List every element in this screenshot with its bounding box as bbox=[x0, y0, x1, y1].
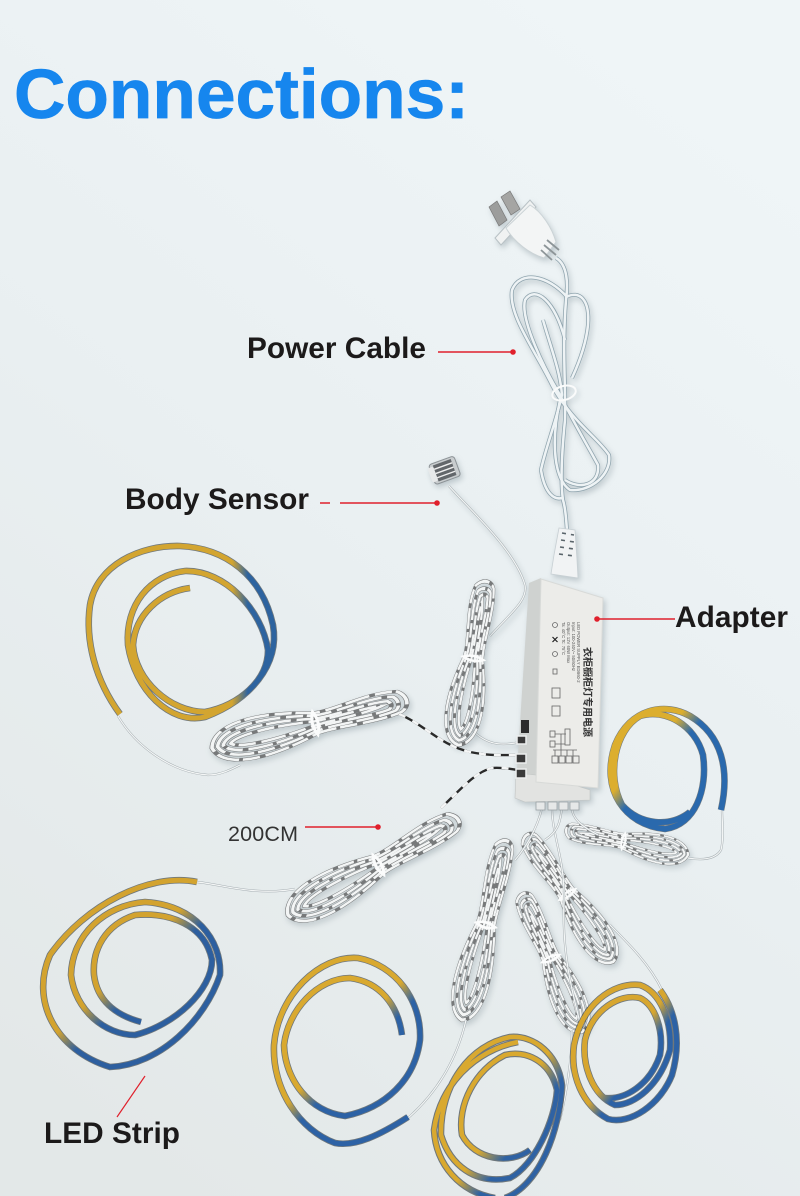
wire bundle: sensor bbox=[441, 578, 504, 748]
body sensor bbox=[426, 456, 527, 744]
callout: power cable bbox=[247, 332, 516, 365]
adapter label text: LED POWER SUPPLY EDB60-2 bbox=[576, 622, 581, 683]
cable loops bbox=[512, 258, 609, 530]
wire bundle: upper left bbox=[207, 682, 411, 767]
LED strip 3 bbox=[43, 880, 220, 1067]
LED strip 1 bbox=[89, 546, 274, 718]
adapter bbox=[515, 578, 603, 810]
adapter symbols bbox=[552, 622, 560, 716]
connecting wires bbox=[118, 714, 723, 1120]
left connectors bbox=[516, 736, 526, 778]
adapter label text: Input: 100-240V~ 50/60Hz bbox=[571, 622, 576, 671]
wire bundle: right bbox=[563, 816, 691, 868]
callout: LED strip: LED Strip bbox=[44, 1117, 180, 1150]
callout: adapter: Adapter bbox=[675, 601, 788, 634]
LED strip 2 bbox=[611, 709, 724, 829]
adapter label text: 衣柜橱柜灯专用电源 bbox=[581, 647, 594, 737]
LED strips bbox=[43, 546, 724, 1196]
adapter front face bbox=[536, 579, 603, 788]
icon: sensor head bbox=[426, 456, 461, 485]
LED strip 4 bbox=[274, 958, 420, 1144]
wire bundle: 200CM bbox=[279, 804, 468, 932]
adapter wiring diagram bbox=[550, 729, 579, 763]
cable connector bbox=[551, 528, 578, 578]
callout: power cable: Power Cable bbox=[247, 332, 426, 365]
adapter label text bbox=[561, 622, 594, 737]
wire bundle: lower right back bbox=[514, 826, 626, 971]
adapter switch bbox=[521, 720, 529, 733]
callout: 200CM bbox=[228, 822, 381, 846]
adapter label text: Ta: 40°C Tc: 75°C bbox=[561, 622, 566, 655]
power cable bbox=[489, 191, 609, 578]
callout: LED strip bbox=[44, 1076, 180, 1150]
callout: body sensor: Body Sensor bbox=[125, 483, 309, 516]
callout: body sensor bbox=[125, 483, 440, 516]
wire bundle: lower centre bbox=[446, 837, 523, 1024]
adapter side and base bbox=[515, 578, 560, 801]
wire bundles bbox=[207, 578, 691, 1038]
adapter base tab bbox=[515, 773, 590, 802]
callout: 200CM: 200CM bbox=[228, 822, 298, 846]
adapter label text: Output: 12V 60W Max bbox=[566, 622, 571, 664]
callout: adapter bbox=[594, 601, 788, 634]
icon: power plug bbox=[489, 191, 559, 260]
LED strip 6 bbox=[573, 985, 677, 1120]
title: Connections: bbox=[14, 55, 469, 133]
bottom connectors bbox=[536, 802, 579, 810]
sensor wire bbox=[449, 486, 527, 744]
LED strip 5 bbox=[434, 1037, 562, 1196]
wire bundle: lower right front bbox=[508, 887, 597, 1038]
